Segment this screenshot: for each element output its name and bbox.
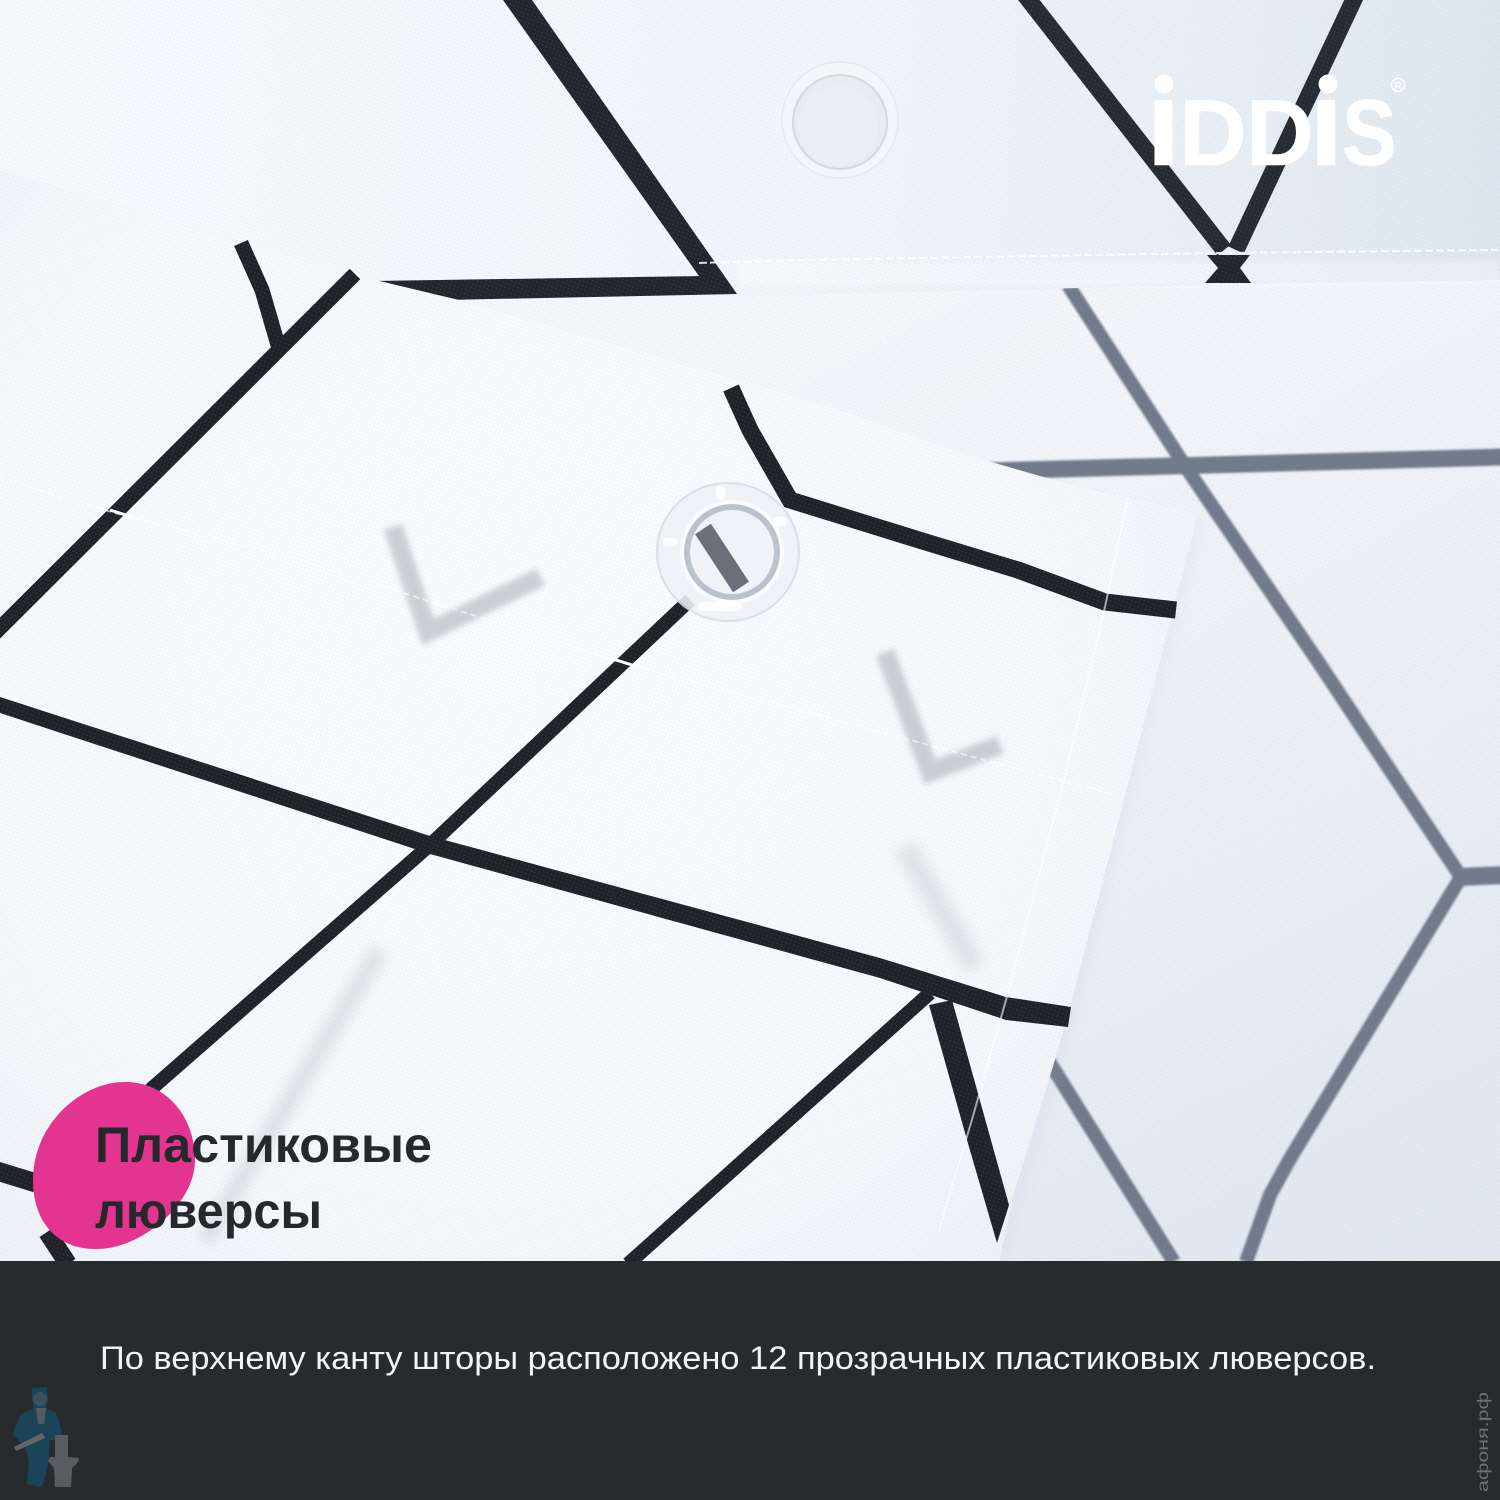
logo: IDDIS: I	[1147, 80, 1180, 185]
stitching	[0, 478, 1128, 1230]
shadow under front panel edge	[1000, 520, 1198, 1262]
logo: IDDIS: S	[1342, 80, 1397, 185]
heading: люверсы	[95, 1183, 322, 1239]
icon: plumber mascot with toilet	[13, 1387, 79, 1487]
footer description: По верхнему канту шторы расположено 12 прозрачных пластиковых люверсов.	[100, 1340, 1376, 1376]
logo: IDDIS: R	[1394, 81, 1402, 92]
black geometric lines	[0, 243, 1176, 1264]
watermark: афоня.рф	[1475, 1392, 1492, 1492]
front curtain panel	[0, 170, 1198, 1264]
pink accent blob	[33, 1082, 195, 1249]
logo: IDDIS	[1147, 74, 1404, 185]
heading	[95, 1117, 432, 1239]
footer band	[0, 1261, 1500, 1500]
icon: top transparent grommet	[782, 62, 898, 178]
heading: Пластиковые	[95, 1117, 432, 1173]
top curtain hem with black lines	[0, 0, 1500, 300]
logo: IDDIS: D	[1179, 80, 1247, 185]
see-through ghost lines	[205, 527, 1000, 1240]
logo: IDDIS: I	[1310, 80, 1343, 185]
logo: IDDIS: D	[1246, 80, 1314, 185]
icon: front transparent grommet	[657, 483, 799, 621]
